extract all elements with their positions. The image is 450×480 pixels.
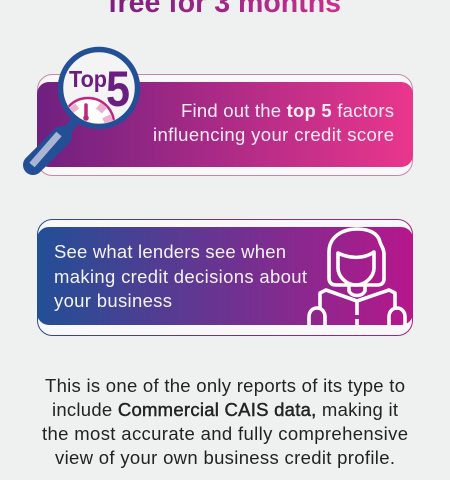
text: Top5: Top [69, 66, 107, 92]
text: top 5 factors [153, 100, 394, 145]
text: what lenders see [54, 241, 307, 311]
icon: magnifying glass: 5 [106, 61, 130, 117]
text: closing statement [42, 375, 408, 468]
panel: top 5 factors [37, 74, 413, 176]
icon: person reading [309, 229, 405, 326]
text: top 5 factors: influencing your credit score [153, 124, 394, 145]
text: closing statement: the most accurate and fully comprehensive [42, 423, 408, 444]
text: closing statement: view of your own business credit profile. [55, 447, 395, 468]
text: what lenders see: your business [54, 290, 172, 311]
text: what lenders see: See what lenders see when [54, 241, 286, 262]
icon: magnifying glass [32, 50, 138, 165]
panel: what lenders see [37, 220, 413, 336]
text: what lenders see: making credit decisions about [54, 266, 307, 287]
text: closing statement: This is one of the only reports of its type to [45, 375, 405, 396]
text: closing statement: include Commercial CAIS data, making it [52, 399, 398, 420]
gauge [68, 96, 115, 124]
text: top 5 factors: Find out the top 5 factors [181, 100, 394, 121]
